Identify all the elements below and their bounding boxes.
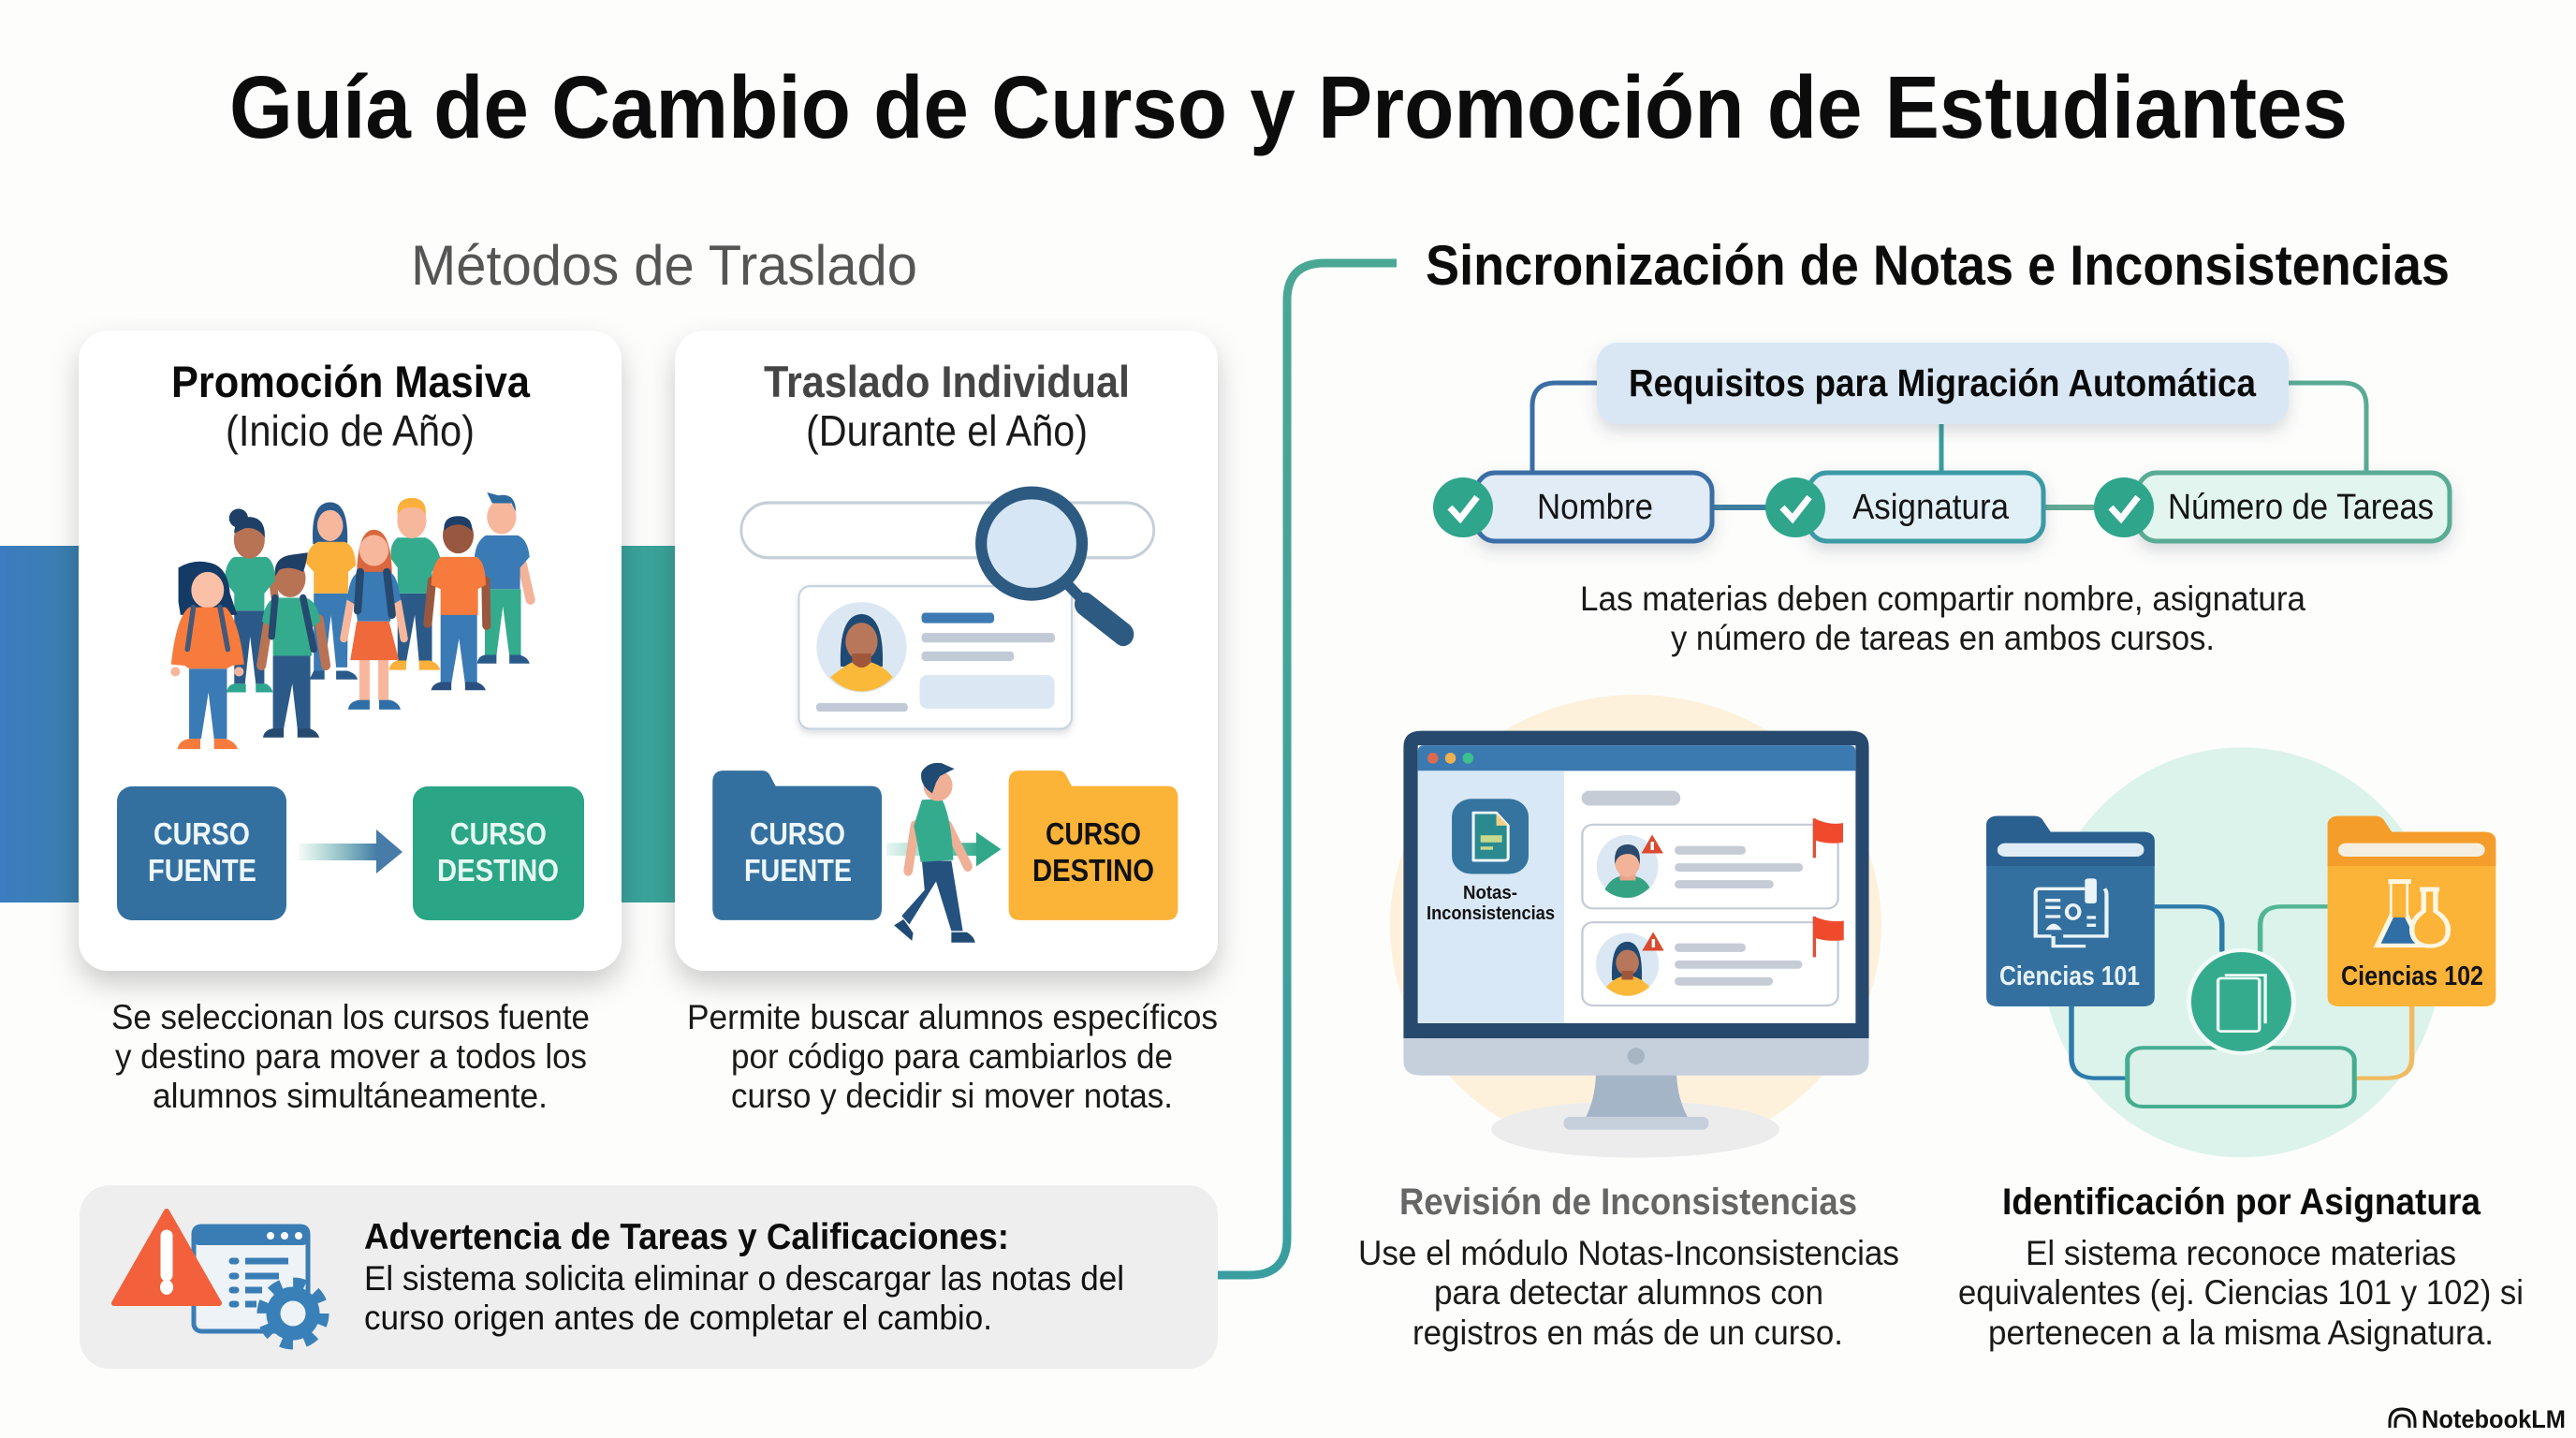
- notebooklm watermark: NotebookLM: [2422, 1405, 2566, 1433]
- text block: revisión de inconsistencias: Use el módulo Notas-Inconsistencias: [1358, 1234, 1899, 1272]
- folder: curso destino: [1009, 770, 1178, 920]
- alert card 2: [1582, 917, 1844, 1005]
- background circle: [1390, 695, 1881, 1156]
- background circle: [2042, 747, 2442, 1157]
- description: traslado individual: por código para cambiarlos de: [731, 1037, 1173, 1076]
- box: curso destino: CURSO: [450, 816, 547, 851]
- monitor base shadow: [1491, 1101, 1779, 1158]
- connector lines: [1532, 383, 2366, 507]
- pill: número de tareas: Número de Tareas: [2168, 488, 2434, 527]
- text block: identificación por asignatura: pertenecen a la misma Asignatura.: [1988, 1313, 2494, 1352]
- connector line between sections: [1218, 263, 1397, 1275]
- panel: advertencia: [80, 1185, 1218, 1369]
- label: curso fuente: [744, 816, 852, 888]
- folder: ciencias 101: [1986, 816, 2155, 1006]
- card heading: traslado individual: [764, 357, 1130, 455]
- pill: nombre: Nombre: [1537, 488, 1653, 527]
- text block: revisión de inconsistencias: [1358, 1181, 1899, 1352]
- label: notas-inconsistencias: Notas-: [1463, 883, 1517, 903]
- text block: revisión de inconsistencias: Revisión de Inconsistencias: [1399, 1181, 1857, 1223]
- subject box: [2128, 1048, 2354, 1107]
- description: promoción masiva: y destino para mover a todos los: [115, 1037, 587, 1076]
- label: notas-inconsistencias: Inconsistencias: [1427, 903, 1555, 924]
- warning text: curso origen antes de completar el cambio.: [364, 1299, 992, 1337]
- card heading: promoción masiva: Promoción Masiva: [171, 357, 531, 406]
- text block: identificación por asignatura: Identificación por Asignatura: [2002, 1181, 2481, 1223]
- monitor stand: [1585, 1074, 1689, 1119]
- label: curso destino: [1032, 816, 1154, 888]
- text block: revisión de inconsistencias: registros en más de un curso.: [1412, 1313, 1843, 1352]
- text block: revisión de inconsistencias: para detectar alumnos con: [1434, 1273, 1823, 1312]
- top grey bar: [1582, 791, 1680, 806]
- text block: identificación por asignatura: [1958, 1181, 2524, 1352]
- pill: número de tareas: [2094, 473, 2450, 541]
- requirements description: [1580, 580, 2305, 657]
- warning text: [364, 1217, 1124, 1337]
- alert card 1: [1582, 818, 1843, 908]
- pill: asignatura: [1765, 473, 2043, 541]
- connecting lines: [2071, 906, 2412, 1078]
- heading: sincronización: Sincronización de Notas e Inconsistencias: [1426, 234, 2450, 297]
- illustration: group of students: [170, 492, 531, 749]
- description: promoción masiva: alumnos simultáneamente.: [153, 1077, 548, 1115]
- description: promoción masiva: [111, 998, 590, 1115]
- bun student: [225, 508, 279, 693]
- label: curso fuente: CURSO: [750, 816, 845, 851]
- panel: traslado individual: [675, 330, 1218, 971]
- heading: métodos de traslado: Métodos de Traslado: [411, 234, 917, 297]
- folder: curso fuente: [712, 770, 882, 920]
- green-shirt boy: [261, 552, 326, 738]
- yellow-shirt student: [306, 503, 358, 680]
- orange-sweater girl: [170, 562, 244, 749]
- diagram: requisitos para migración: [1433, 343, 2450, 657]
- pill: asignatura: Asignatura: [1852, 488, 2010, 527]
- magnifying glass: [981, 492, 1123, 635]
- description: traslado individual: curso y decidir si mover notas.: [731, 1077, 1173, 1115]
- pill: nombre: [1433, 473, 1712, 541]
- label: curso destino: DESTINO: [1032, 853, 1154, 888]
- text block: identificación por asignatura: El sistema reconoce materias: [2026, 1234, 2456, 1272]
- text block: identificación por asignatura: equivalentes (ej. Ciencias 101 y 102) si: [1958, 1273, 2524, 1312]
- warning text: El sistema solicita eliminar o descargar las notas del: [364, 1259, 1124, 1298]
- student record card: [798, 586, 1072, 729]
- card heading: promoción masiva: (Inicio de Año): [226, 406, 475, 455]
- illustration: search and student record: [712, 492, 1178, 943]
- box: curso fuente: FUENTE: [148, 853, 256, 888]
- box: curso destino: DESTINO: [437, 853, 559, 888]
- central book node: [2188, 950, 2293, 1053]
- app icon: [1452, 799, 1529, 874]
- card heading: promoción masiva: [171, 357, 531, 455]
- label: curso fuente: FUENTE: [744, 853, 852, 888]
- requirements description: y número de tareas en ambos cursos.: [1671, 619, 2215, 657]
- left band: blue: [0, 546, 84, 902]
- arrow: [886, 832, 1001, 866]
- illustration: subject folders: [1986, 747, 2496, 1157]
- card heading: traslado individual: (Durante el Año): [806, 406, 1088, 455]
- red-hair student: [344, 530, 404, 710]
- label: notas-inconsistencias: [1427, 883, 1555, 924]
- label: curso destino: CURSO: [1046, 816, 1141, 851]
- description: traslado individual: Permite buscar alumnos específicos: [687, 998, 1218, 1036]
- icon: warning and settings: [114, 1211, 324, 1344]
- blue man: [474, 492, 531, 664]
- search bar: [741, 503, 1154, 558]
- box: curso destino: [413, 786, 584, 920]
- arrow: fuente to destino: [299, 829, 402, 873]
- flasks: [2378, 882, 2448, 946]
- monitor body: [1403, 731, 1869, 1038]
- box: curso fuente: [117, 786, 286, 920]
- panel: promoción masiva: [79, 330, 622, 971]
- card heading: traslado individual: Traslado Individual: [764, 357, 1130, 406]
- requirements header: [1597, 343, 2289, 424]
- screen: [1418, 745, 1855, 1023]
- warning text: Advertencia de Tareas y Calificaciones:: [364, 1217, 1009, 1257]
- requirements header: Requisitos para Migración Automática: [1629, 361, 2257, 404]
- middle band: teal: [618, 546, 680, 902]
- walking student: [894, 763, 975, 943]
- orange-hair student: [389, 498, 441, 670]
- box: curso fuente: CURSO: [154, 816, 250, 851]
- description: traslado individual: [687, 998, 1218, 1115]
- dark-skin student: [428, 516, 487, 690]
- folder: ciencias 102: [2328, 816, 2496, 1006]
- requirements description: Las materias deben compartir nombre, asignatura: [1580, 580, 2305, 618]
- label: ciencias 102: Ciencias 102: [2341, 961, 2483, 991]
- illustration: monitor with inconsistencies: [1390, 695, 1881, 1158]
- label: ciencias 101: Ciencias 101: [1999, 961, 2140, 991]
- description: promoción masiva: Se seleccionan los cursos fuente: [111, 998, 590, 1036]
- title: Guía de Cambio de Curso y Promoción de Estudiantes: [229, 58, 2348, 157]
